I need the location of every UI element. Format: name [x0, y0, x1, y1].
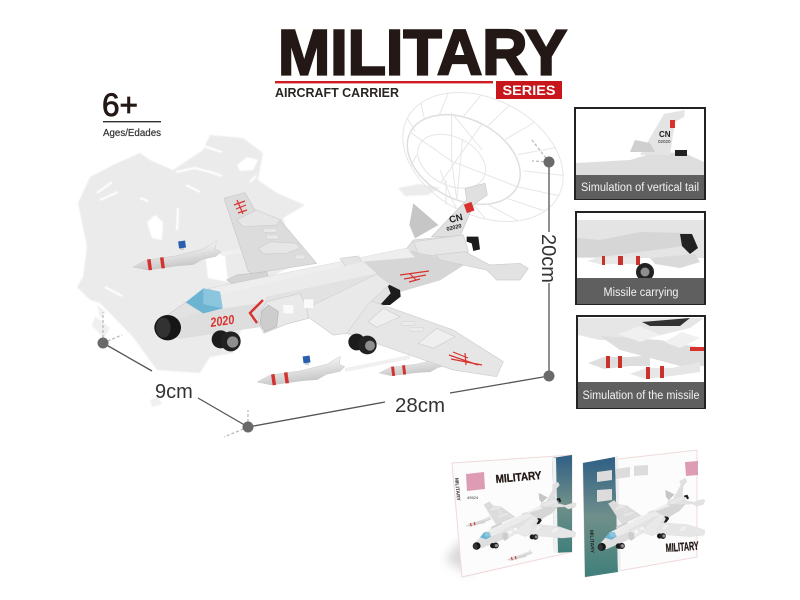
age caption: Ages/Edades	[103, 128, 161, 139]
caption band	[576, 175, 704, 199]
product box: angled: MILITARY	[665, 539, 699, 555]
series badge	[496, 81, 562, 99]
red insignia marks	[234, 200, 482, 365]
tail number: 02020	[446, 223, 462, 233]
age number: 6+	[102, 87, 138, 123]
product box: front: MILITARY	[495, 470, 542, 486]
title rule	[275, 81, 493, 83]
panel: vertical tail	[575, 108, 705, 199]
product box: front	[445, 455, 584, 577]
tail marking CN: CN	[448, 212, 464, 226]
missile streaks	[222, 243, 410, 372]
caption: Simulation of vertical tail	[581, 182, 699, 194]
product box: front: MILITARY	[453, 478, 461, 502]
missile: near fuselage	[255, 355, 346, 388]
panel: missile carrying	[576, 212, 705, 304]
age label	[102, 87, 161, 139]
caption band	[578, 382, 704, 408]
fuselage number 2020: 2020	[209, 312, 236, 330]
dimension lines	[98, 140, 554, 437]
caption: Simulation of the missile	[582, 390, 700, 402]
title word: MILITARY: MILITARY	[278, 16, 567, 88]
series badge: SERIES	[502, 83, 556, 98]
dimension: 9cm: 9cm	[155, 381, 193, 403]
dimension: 20cm: 20cm	[537, 234, 559, 283]
dimension: 28cm: 28cm	[395, 395, 445, 417]
title	[275, 16, 567, 100]
subtitle: aircraft carrier: AIRCRAFT CARRIER	[275, 86, 399, 100]
caption: Missile carrying	[604, 287, 678, 299]
panel: vertical tail: CN	[659, 130, 671, 139]
caption band	[577, 278, 704, 304]
radar dish wireframe	[381, 67, 585, 247]
product box: angled: MILITARY	[588, 530, 595, 554]
product box: angled	[583, 450, 714, 577]
aircraft model	[131, 183, 528, 388]
panel: vertical tail: 02020	[658, 139, 671, 144]
world map background	[77, 135, 440, 407]
tail red emblem	[464, 202, 474, 213]
missile: far wing	[131, 241, 222, 273]
aircraft body	[154, 183, 528, 377]
missile: near wing outer	[378, 352, 455, 378]
panel: simulation of the missile	[577, 316, 705, 408]
product box: front: 49524	[467, 495, 479, 500]
